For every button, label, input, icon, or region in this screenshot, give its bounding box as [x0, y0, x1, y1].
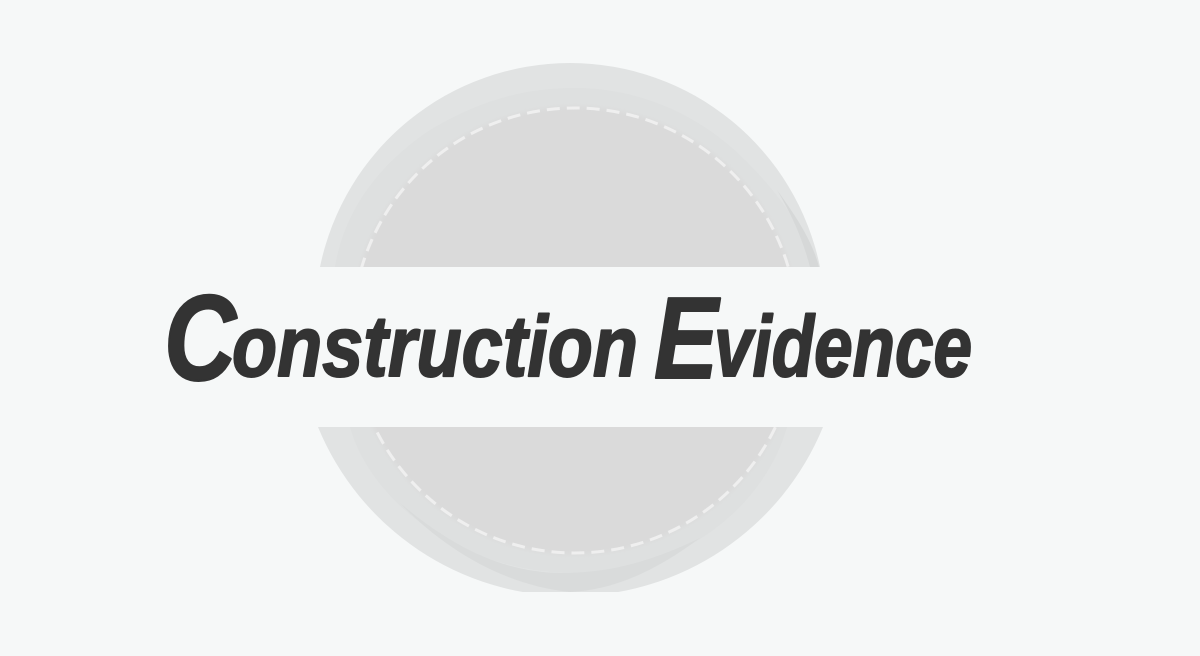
title band: [290, 267, 850, 427]
inner disk: [351, 106, 799, 554]
title: E: [654, 273, 721, 403]
title: onstruction: [232, 299, 638, 395]
upper-right shadow sliver: [780, 194, 819, 267]
title: vidence: [714, 299, 972, 395]
lower shadow crescent: [400, 503, 700, 592]
middle ring: [335, 88, 815, 573]
dashed circle outline: [352, 108, 798, 553]
title: C: [164, 270, 238, 406]
badge: layered grey circle: [318, 63, 823, 596]
infographic canvas: [168, 63, 971, 592]
outer pale shape: [318, 63, 823, 596]
